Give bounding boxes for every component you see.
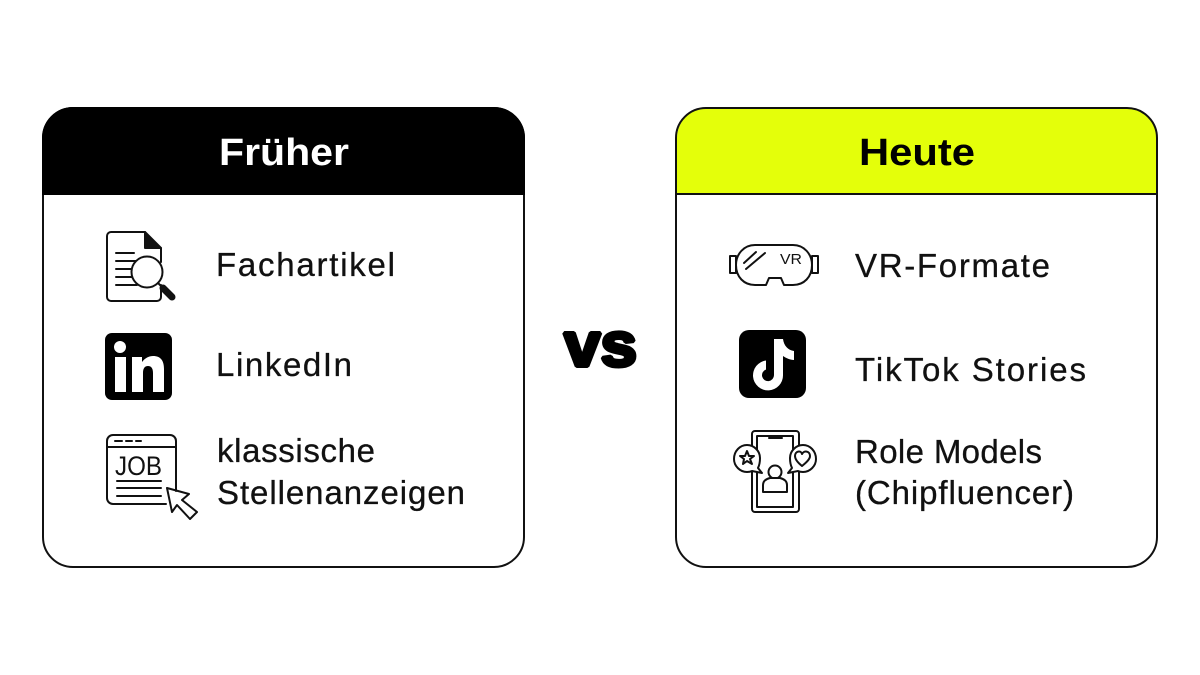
label: LinkedIn: LinkedIn [216,346,352,383]
label: Role Models (Chipfluencer) [855,433,1074,511]
panel: Heute [676,108,1157,567]
icon: phone with role model and speech bubbles [734,431,816,512]
label: Role Models (Chipfluencer): Role Models [855,433,1042,470]
heading: Früher: Früher [219,132,349,174]
icon: document with magnifier [107,232,172,301]
label: TikTok Stories: TikTok Stories [855,351,1086,388]
icon: job listing window with cursor: JOB [115,451,162,481]
heading: Heute: Heute [859,132,975,174]
header band: Früher [42,107,525,195]
label: klassische Stellenanzeigen [217,432,465,511]
label: klassische Stellenanzeigen: Stellenanzeigen [217,474,465,511]
label: Fachartikel: Fachartikel [216,246,395,283]
icon: VR headset: VR [780,251,802,268]
icon: VR headset [730,245,818,285]
panel: Früher [42,107,525,567]
vs label: vs [564,311,637,380]
icon: TikTok [739,330,806,398]
icon: job listing window with cursor [107,435,197,519]
label: klassische Stellenanzeigen: klassische [217,432,375,469]
icon: LinkedIn [105,333,172,400]
label: Role Models (Chipfluencer): (Chipfluencer) [855,474,1074,511]
label: VR-Formate: VR-Formate [855,247,1050,284]
